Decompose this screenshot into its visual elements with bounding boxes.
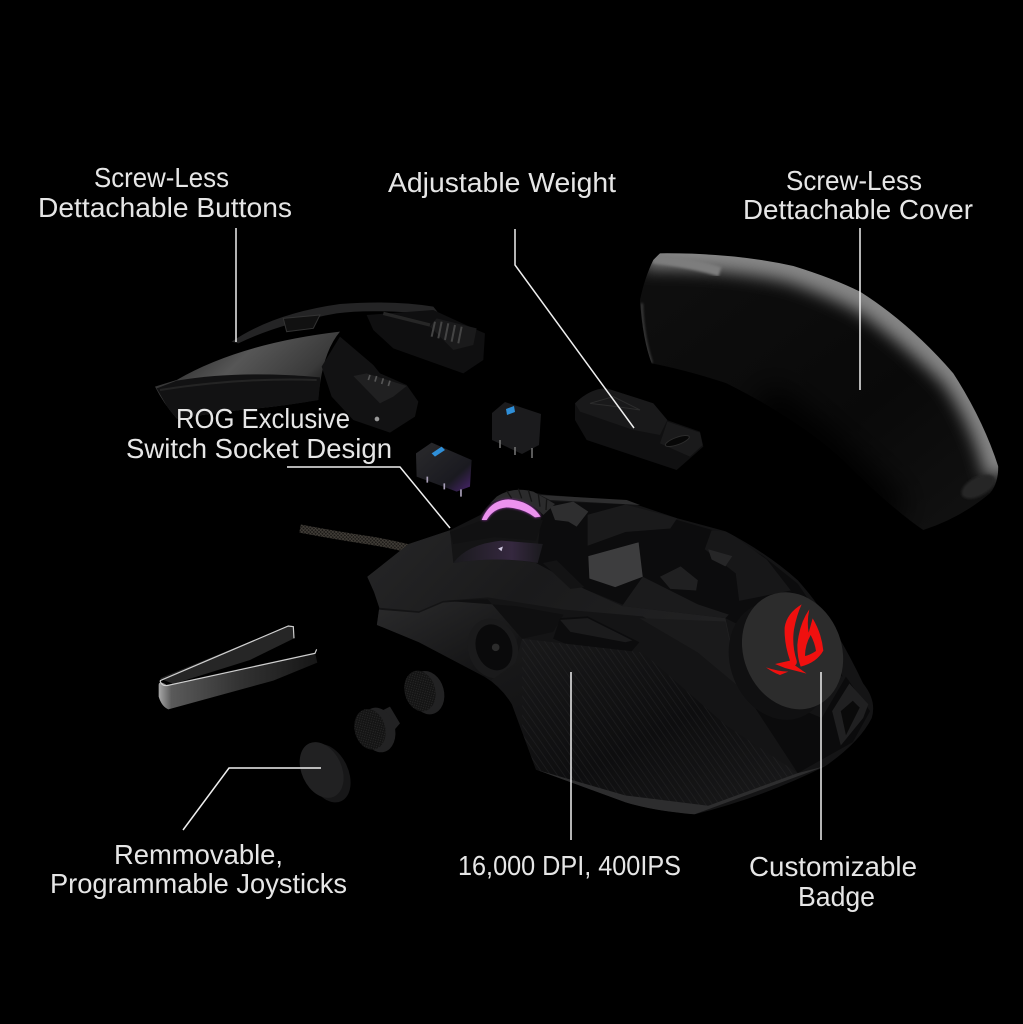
left socket — [322, 337, 418, 433]
label: joysticks — [50, 839, 347, 899]
grip surface — [568, 644, 629, 652]
cap 2 — [350, 704, 400, 756]
label: switch socket: ROG Exclusive — [176, 403, 350, 434]
customizable badge base — [711, 577, 860, 735]
label: badge: Customizable — [749, 851, 917, 882]
cap 1 — [400, 667, 449, 718]
leader lines — [183, 228, 860, 840]
mouse body — [300, 490, 873, 814]
label: joysticks: Programmable Joysticks — [50, 868, 347, 899]
cap 3 — [291, 735, 359, 810]
right button arch — [232, 302, 440, 343]
left button — [155, 332, 340, 418]
light hexagon window — [588, 542, 643, 587]
cable — [300, 529, 409, 549]
outline — [367, 490, 873, 814]
label: switch socket — [126, 403, 392, 464]
label: dpi: 16,000 DPI, 400IPS — [458, 850, 681, 881]
label: detachable buttons: Screw-Less — [94, 162, 229, 193]
detachable buttons — [155, 302, 485, 433]
tool clip — [159, 626, 317, 709]
purple glow panel — [453, 541, 543, 563]
detachable cover — [640, 247, 1007, 530]
label: detachable cover: Dettachable Cover — [743, 194, 973, 225]
label: detachable buttons: Dettachable Buttons — [38, 192, 292, 223]
micro switch left with purple glow — [416, 443, 472, 497]
label: switch socket: Switch Socket Design — [126, 433, 392, 464]
label: detachable buttons — [38, 162, 292, 223]
joystick socket — [494, 668, 506, 674]
label: badge — [749, 851, 917, 912]
label: adjustable weight: Adjustable Weight — [388, 167, 616, 198]
side button — [553, 616, 639, 653]
right socket — [367, 310, 485, 373]
top shell band — [368, 530, 730, 640]
ROG logo on badge — [766, 604, 823, 675]
rear right section — [756, 677, 870, 773]
interior cavity — [536, 501, 842, 677]
joystick caps — [291, 667, 449, 810]
side panel left — [377, 602, 499, 650]
label: detachable cover — [743, 165, 973, 225]
label: badge: Badge — [798, 881, 875, 912]
label: joysticks: Remmovable, — [114, 839, 283, 870]
adjustable weight block — [575, 388, 703, 470]
micro switch right — [492, 402, 541, 458]
scroll wheel and RGB ring — [482, 489, 640, 527]
label: detachable cover: Screw-Less — [786, 165, 922, 196]
right side panel — [639, 618, 739, 687]
